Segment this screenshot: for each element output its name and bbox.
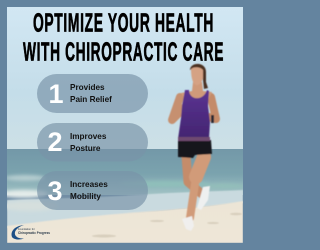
waistband <box>178 137 210 141</box>
wrist band <box>211 115 214 123</box>
panel: benefit 3 <box>37 171 148 210</box>
front shoe <box>182 216 194 231</box>
label 3: Mobility <box>70 192 101 201</box>
title <box>23 10 224 66</box>
runner <box>172 64 216 231</box>
label 1: Pain Relief <box>70 95 112 104</box>
logo text: Foundation for <box>18 227 35 231</box>
number 1: 1 <box>48 79 64 109</box>
neck and chest <box>181 82 212 104</box>
infographic canvas <box>7 7 243 243</box>
logo text: Chiropractic Progress <box>18 231 50 235</box>
panel: benefit 2 <box>37 123 148 162</box>
front leg <box>196 157 204 177</box>
number 2: 2 <box>47 127 63 157</box>
back leg <box>186 156 203 195</box>
label 1: Provides <box>70 83 105 92</box>
back shoe <box>197 186 210 210</box>
logo <box>12 225 50 239</box>
fist left <box>182 100 192 108</box>
arm left <box>172 97 187 120</box>
label 3: Increases <box>70 180 108 189</box>
shorts <box>178 140 212 158</box>
tank top <box>178 90 210 139</box>
frame <box>0 0 250 250</box>
face <box>191 67 203 85</box>
label 2: Improves <box>70 132 107 141</box>
label 2: Posture <box>70 144 101 153</box>
hair <box>190 64 208 89</box>
number 3: 3 <box>47 176 63 206</box>
photo: beach background <box>0 7 245 243</box>
logo swoosh <box>12 225 24 239</box>
arm right <box>209 97 216 119</box>
panel: benefit 1 <box>37 74 148 113</box>
